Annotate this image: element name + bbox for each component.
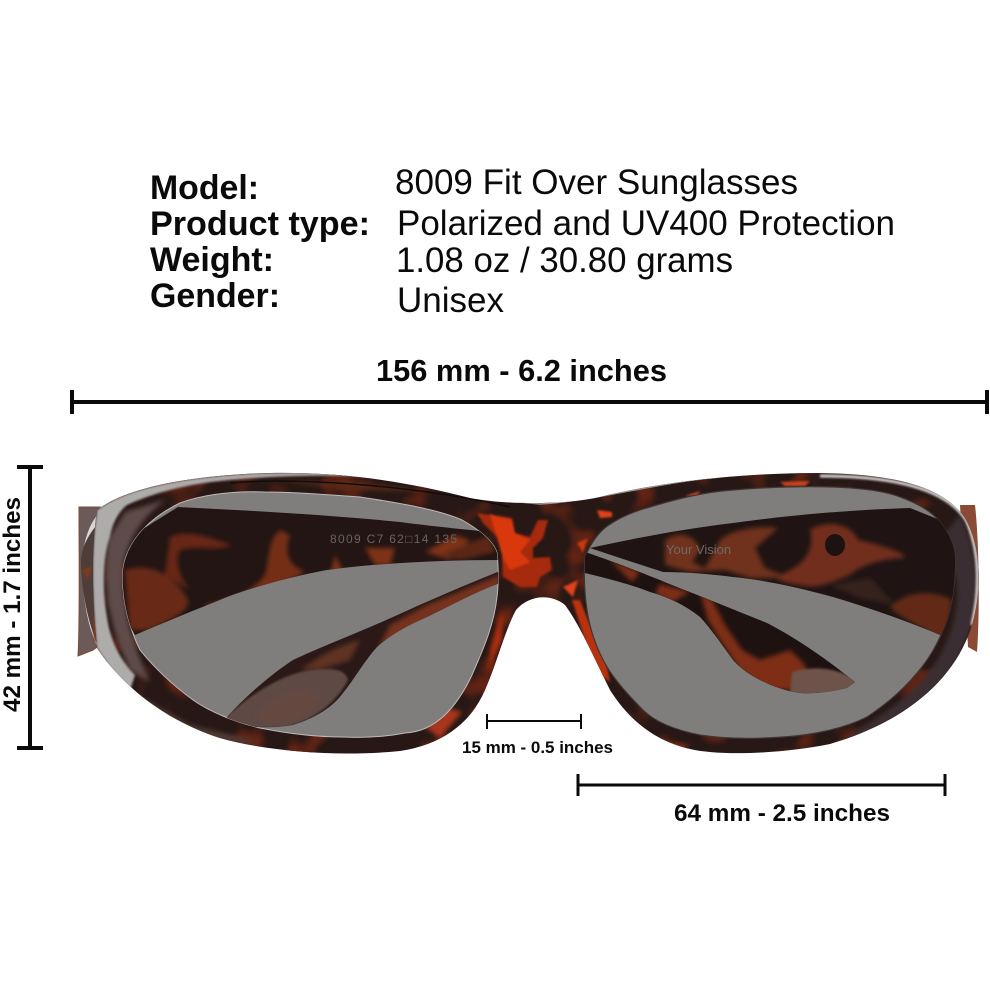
label: Product type: Product type: xyxy=(150,205,370,243)
dimension: bridge width: 15 mm - 0.5 inches xyxy=(462,738,613,757)
bridge orange markings xyxy=(477,481,810,682)
value: model: 8009 Fit Over Sunglasses xyxy=(395,163,798,202)
right lens: lower temple reflection xyxy=(585,552,855,694)
left lens: upper temple reflection xyxy=(122,507,498,635)
label: Weight: Weight: xyxy=(150,241,274,279)
value: weight: 1.08 oz / 30.80 grams xyxy=(396,241,733,280)
dimension: lens width xyxy=(578,774,945,827)
dimension: lens height xyxy=(0,467,43,748)
frame xyxy=(93,473,979,753)
dimension: total width: 156 mm - 6.2 inches xyxy=(376,353,667,388)
dimension: bridge width xyxy=(462,714,613,757)
left lens xyxy=(110,492,505,737)
right lens xyxy=(580,487,960,738)
frame tortoise pattern xyxy=(80,465,985,760)
dimension: lens width: 64 mm - 2.5 inches xyxy=(674,800,890,827)
right lens: upper temple reflection xyxy=(590,508,955,636)
heading: specifications table xyxy=(150,163,895,320)
right lens: printed brand text: Your Vision xyxy=(666,542,731,557)
left lens: lower temple reflection xyxy=(227,572,498,728)
left lens: printed frame code: 8009 C7 62□14 135 xyxy=(330,532,457,546)
value: gender: Unisex xyxy=(397,281,504,320)
right temple arm xyxy=(960,505,979,652)
frame highlights xyxy=(93,473,370,690)
sunglasses photo xyxy=(78,465,985,760)
value: product type: Polarized and UV400 Protection xyxy=(397,204,895,243)
left temple arm xyxy=(78,507,110,662)
label: Model: Model: xyxy=(150,169,259,207)
dimension: total width xyxy=(72,353,987,414)
label: Gender: Gender: xyxy=(150,277,280,315)
